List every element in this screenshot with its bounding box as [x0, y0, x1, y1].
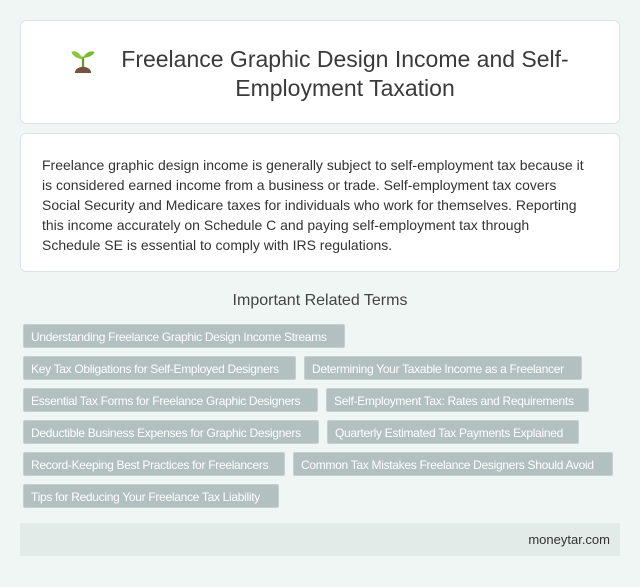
icon: sprout	[71, 51, 95, 73]
footer text: moneytar.com	[528, 532, 610, 547]
tags: Understanding Freelance Graphic Design Income Streams	[31, 330, 327, 344]
tags: Essential Tax Forms for Freelance Graphic Designers	[31, 394, 300, 408]
tags: Quarterly Estimated Tax Payments Explained	[335, 426, 563, 440]
tags: Key Tax Obligations for Self-Employed Designers	[31, 362, 279, 376]
heading: related terms: Important Related Terms	[233, 292, 407, 309]
tags: Deductible Business Expenses for Graphic Designers	[31, 426, 301, 440]
tags: Self-Employment Tax: Rates and Requirements	[334, 394, 574, 408]
tags: Determining Your Taxable Income as a Freelancer	[312, 362, 564, 376]
description card	[20, 133, 620, 272]
description text: Freelance graphic design income is generally subject to self-employment tax because it is considered earned income from a business or trade. Self-employment tax covers Social Security and Medicare taxes for individuals who work for themselves. Reporting this income accurately on Schedule C and paying self-employment tax through Schedule SE is essential to comply with IRS regulations.	[42, 157, 584, 253]
tags: Record-Keeping Best Practices for Freelancers	[31, 458, 268, 472]
title card	[20, 20, 620, 124]
title: Freelance Graphic Design Income and Self-Employment Taxation	[121, 46, 569, 101]
footer	[20, 523, 620, 556]
tags: Tips for Reducing Your Freelance Tax Liability	[31, 490, 260, 504]
tags: Common Tax Mistakes Freelance Designers Should Avoid	[301, 458, 594, 472]
